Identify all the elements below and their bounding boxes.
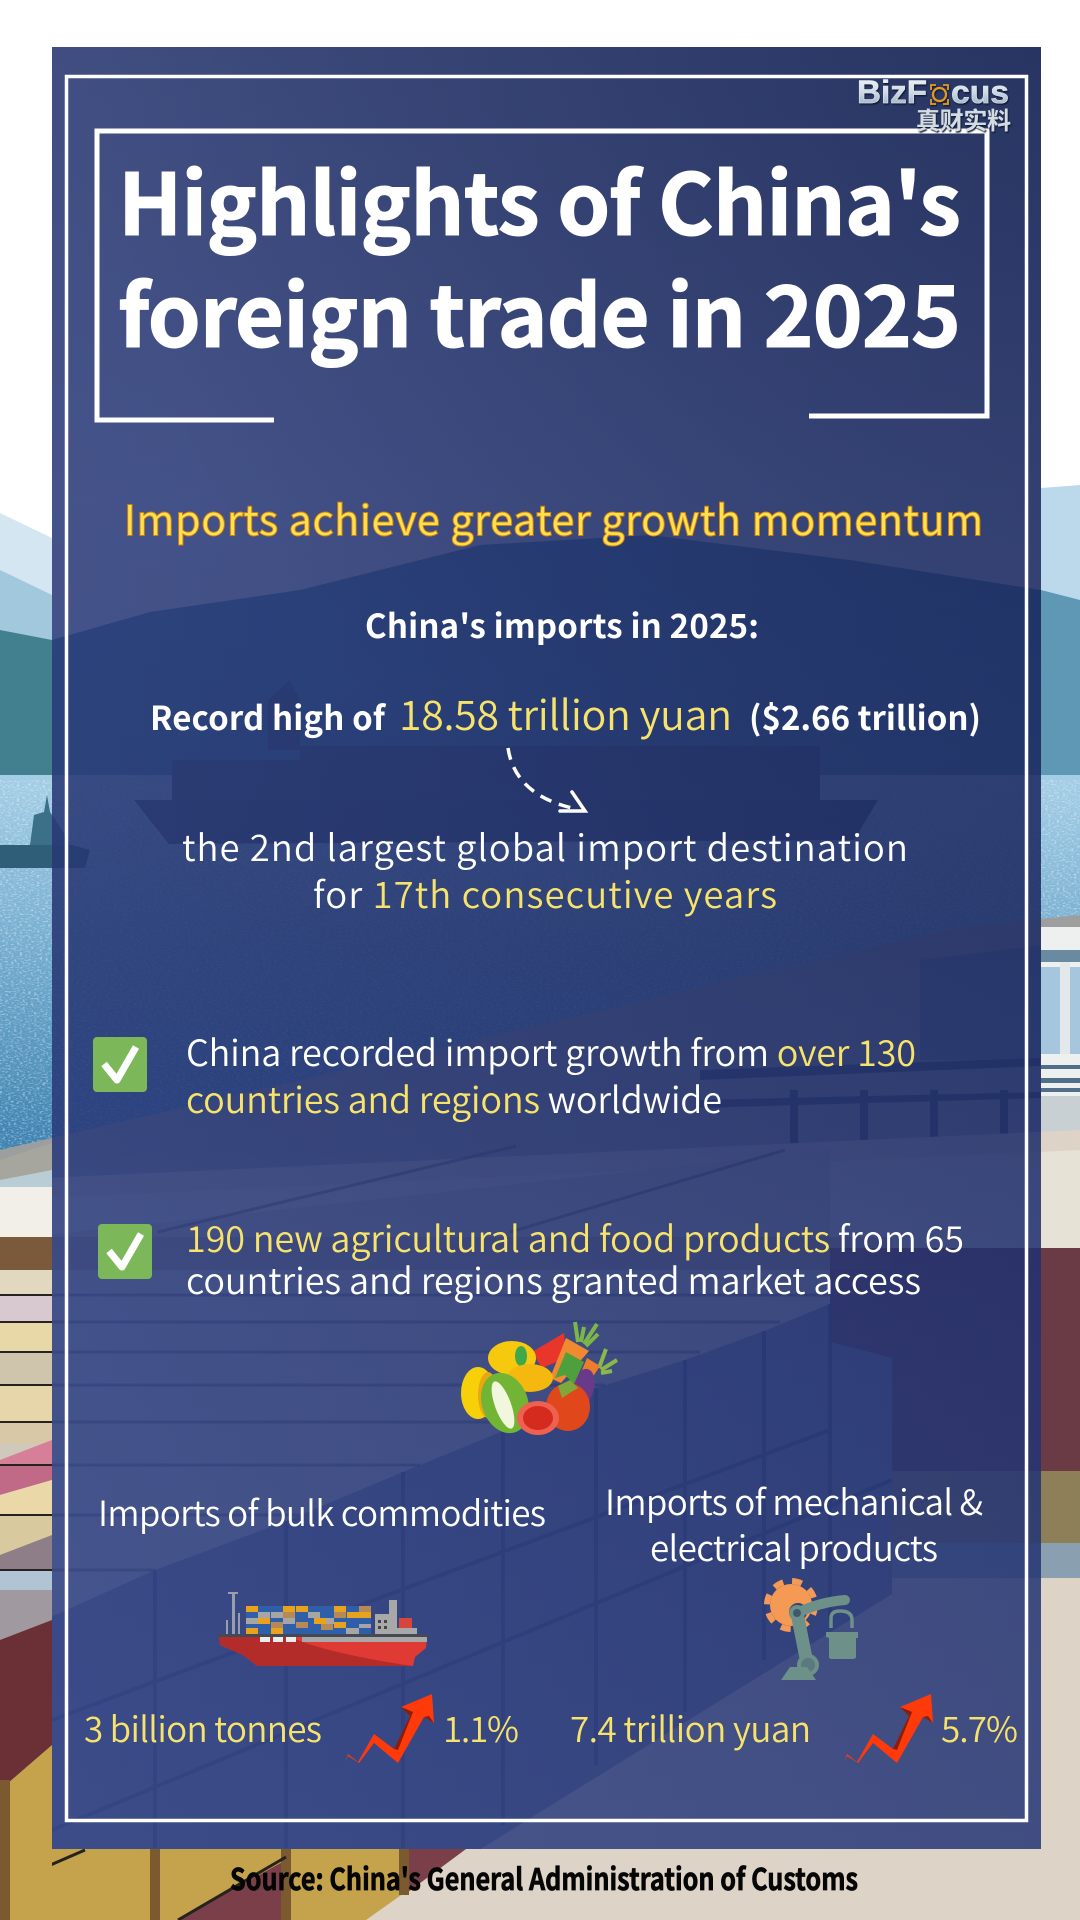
icon: fruit and vegetables — [461, 1322, 617, 1440]
title frame — [97, 131, 987, 420]
icon: check box 2 — [98, 1224, 152, 1279]
icon: container ship — [218, 1592, 428, 1666]
text: record high: ($2.66 trillion) — [749, 692, 981, 740]
logo: BizFocus: cus — [951, 74, 1009, 110]
text: market access — [186, 1211, 964, 1305]
left strip containers — [0, 1143, 52, 1920]
logo: BizFocus: 真财实料 — [916, 101, 1011, 136]
text: record high — [150, 682, 981, 742]
source note: Source: China's General Administration of Customs — [230, 1855, 858, 1899]
text: mechanical and electrical heading — [605, 1475, 983, 1572]
text: import growth — [186, 1025, 916, 1124]
text: 2nd largest import destination: for 17th consecutive years — [313, 866, 777, 919]
text: bulk commodities heading: Imports of bulk commodities — [98, 1486, 546, 1537]
text: 2nd largest import destination: the 2nd largest global import destination — [182, 819, 908, 872]
text: mechanical and electrical heading: electrical products — [650, 1521, 938, 1572]
icon: check box 1 — [93, 1037, 147, 1092]
text: record high: Record high of — [150, 692, 387, 740]
container stack — [0, 1146, 892, 1920]
logo: BizFocus — [857, 74, 1011, 136]
title: Highlights of China's — [118, 137, 961, 260]
arrow: mechanical and electrical up — [844, 1694, 933, 1763]
subheading: Imports achieve greater growth momentum — [124, 487, 983, 547]
text: import growth: China recorded import growth from over 130 — [186, 1025, 916, 1077]
arrow: bulk commodities up — [345, 1694, 434, 1763]
title — [118, 137, 961, 372]
logo: BizFocus: BizF — [857, 74, 927, 110]
stat: mechanical and electrical value: 7.4 trillion yuan — [570, 1702, 811, 1753]
text: import growth: countries and regions worldwide — [186, 1072, 722, 1124]
text: market access: 190 new agricultural and food products from 65 — [186, 1211, 964, 1263]
title: foreign trade in 2025 — [118, 249, 961, 372]
icon: robot arm and gear — [767, 1581, 858, 1680]
text: market access: countries and regions granted market access — [186, 1253, 921, 1305]
stat: bulk commodities volume: 3 billion tonnes — [84, 1702, 322, 1753]
text: mechanical and electrical heading: Imports of mechanical & — [605, 1475, 983, 1526]
text: record high: 18.58 trillion yuan — [399, 682, 732, 742]
stat: mechanical and electrical growth: 5.7% — [941, 1702, 1018, 1753]
stat: bulk commodities growth: 1.1% — [443, 1702, 519, 1753]
text: China's imports in 2025: China's imports in 2025: — [365, 600, 759, 648]
arrow: dashed curve — [508, 748, 585, 811]
text: 2nd largest import destination — [182, 819, 908, 919]
